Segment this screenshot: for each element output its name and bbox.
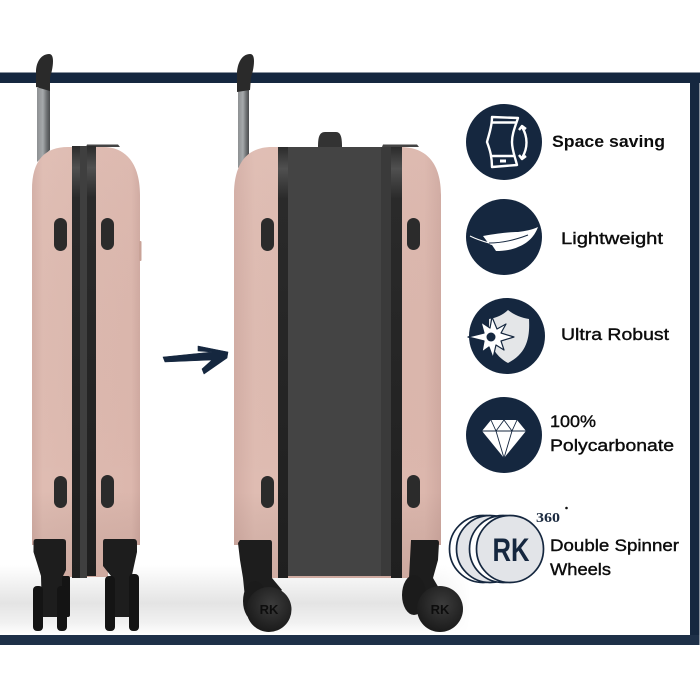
label: Double Spinner bbox=[550, 536, 679, 555]
shell bbox=[32, 147, 140, 577]
feature: ultra robust bbox=[468, 298, 669, 374]
label: Polycarbonate bbox=[550, 436, 674, 455]
feature: polycarbonate bbox=[466, 397, 674, 473]
icon: impact star bbox=[468, 317, 514, 358]
wheel left: RK bbox=[260, 602, 279, 617]
suitcase: front view expanded bbox=[234, 54, 463, 632]
grip pads bbox=[261, 218, 420, 508]
icon: diamond bbox=[482, 420, 526, 458]
grip pads bbox=[54, 218, 114, 508]
icon: stacked discs: RK bbox=[492, 532, 530, 568]
expansion panel bbox=[278, 147, 402, 578]
floor shadow bbox=[0, 577, 444, 628]
360 degree mark: 360 bbox=[536, 511, 560, 526]
telescopic handle bbox=[237, 54, 254, 168]
icon: feather bbox=[470, 227, 538, 251]
label: Ultra Robust bbox=[561, 325, 669, 344]
360 degree mark bbox=[536, 507, 568, 526]
feature: double spinner wheels bbox=[450, 507, 679, 582]
top carry handle side bbox=[86, 144, 120, 147]
icon: flexing case bbox=[487, 117, 526, 167]
central black band bbox=[72, 146, 96, 578]
feature: space saving bbox=[466, 104, 665, 180]
wheel assembly right bbox=[103, 539, 139, 631]
label: 100% bbox=[550, 412, 596, 431]
zipper cap bbox=[382, 144, 419, 147]
top carry handle bbox=[318, 132, 342, 147]
icon: stacked discs bbox=[450, 516, 544, 582]
label: Lightweight bbox=[561, 229, 663, 248]
side bump bbox=[139, 241, 142, 261]
wheel assembly left bbox=[33, 539, 70, 631]
label: Space saving bbox=[552, 132, 665, 151]
wheel right: RK bbox=[431, 602, 450, 617]
wheel right bbox=[402, 540, 463, 632]
icon: shield bbox=[489, 310, 529, 363]
wheel left bbox=[238, 540, 292, 632]
label: Wheels bbox=[550, 560, 611, 579]
arrow bbox=[163, 346, 228, 374]
feature: lightweight bbox=[466, 199, 663, 275]
telescopic handle bbox=[36, 54, 53, 162]
shell bbox=[234, 147, 441, 578]
suitcase: side view collapsed bbox=[32, 54, 142, 631]
